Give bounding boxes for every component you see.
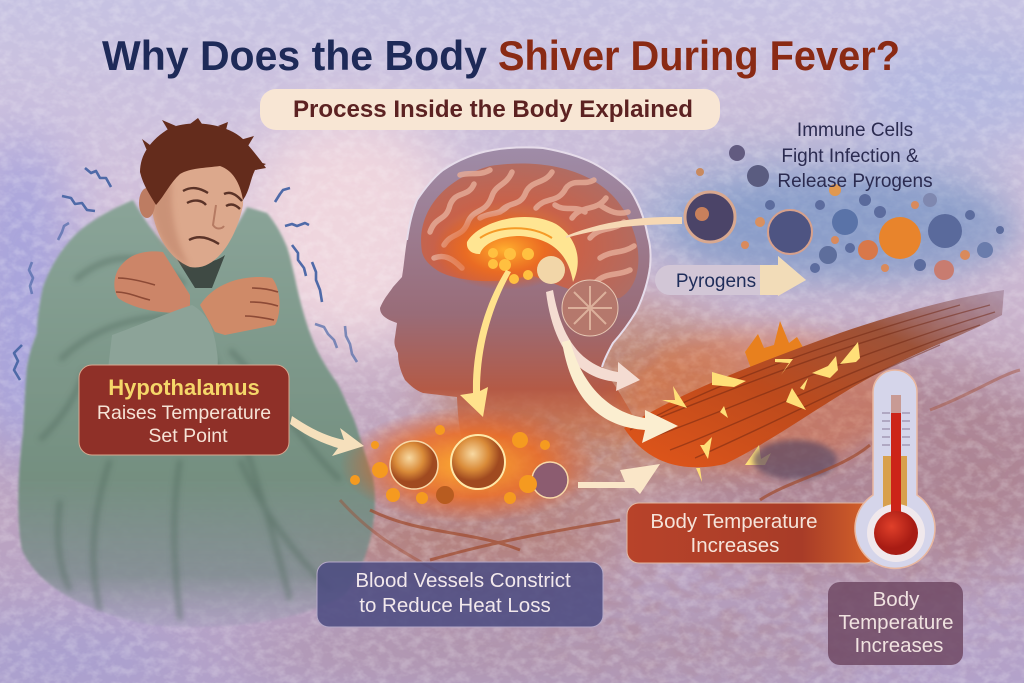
arrow: hypothalamus to cells	[290, 416, 364, 456]
thermometer	[855, 370, 935, 568]
second body temperature label: Increases	[855, 634, 943, 657]
arrow: brain to muscle lower	[562, 340, 678, 443]
blanket sleeve	[105, 305, 218, 400]
neck shadow	[165, 240, 225, 288]
arrow: cells to temperature	[578, 464, 660, 494]
hypothalamus label: Set Point	[148, 425, 228, 447]
thalamus	[537, 256, 565, 284]
subtitle pill: Process Inside the Body Explained	[293, 96, 693, 123]
brain	[421, 163, 638, 298]
immune cells	[675, 145, 1015, 280]
blood vessels label: Blood Vessels Constrict	[355, 569, 571, 592]
arrow: cell to brain	[566, 217, 682, 238]
blood vessels label	[317, 562, 603, 627]
head profile	[380, 147, 651, 450]
body temperature label: Increases	[691, 534, 779, 557]
blanket folds	[40, 258, 340, 620]
hypothalamus glow	[433, 210, 577, 290]
hypothalamus label: Raises Temperature	[97, 402, 271, 424]
ear	[139, 188, 155, 218]
immune cells label: Fight Infection &	[781, 146, 919, 167]
title	[102, 32, 900, 79]
blood vessels	[340, 370, 1020, 590]
pyrogens label with arrow: Pyrogens	[676, 271, 756, 292]
blood vessels label: to Reduce Heat Loss	[359, 594, 551, 617]
second body temperature label: Body	[873, 588, 920, 611]
muscle fibres	[620, 290, 1004, 482]
person wrapped in blanket	[18, 118, 375, 627]
cerebellum	[562, 280, 618, 336]
finger lines	[116, 278, 278, 320]
pyrogens label with arrow	[655, 256, 806, 296]
subtitle pill	[260, 89, 720, 130]
blanket	[18, 200, 375, 627]
immune cells label	[777, 120, 933, 192]
second body temperature label: Temperature	[838, 611, 954, 634]
eyes, brows and mouth	[183, 188, 242, 244]
second body temperature label	[828, 582, 963, 665]
immune cells label: Immune Cells	[797, 120, 913, 141]
right hand	[200, 277, 280, 335]
title: Shiver During Fever?	[498, 32, 900, 79]
hypothalamus label	[79, 365, 289, 455]
hair	[140, 118, 266, 205]
glowing cell cluster	[340, 407, 600, 523]
brain folds	[430, 170, 634, 282]
title: Why Does the Body	[102, 32, 488, 79]
arrow: brain to cells	[460, 270, 511, 417]
skull rim	[407, 147, 651, 367]
immune cells label: Release Pyrogens	[777, 171, 933, 192]
body temperature label: Body Temperature	[650, 510, 818, 533]
face shading	[150, 180, 190, 267]
left hand	[114, 251, 190, 313]
shiver lines	[14, 168, 357, 380]
dark tissue	[753, 440, 837, 480]
arrow: brain to muscle upper	[546, 290, 640, 391]
body temperature label	[627, 503, 877, 563]
hypothalamus label: Hypothalamus	[108, 375, 260, 400]
face	[150, 150, 244, 268]
